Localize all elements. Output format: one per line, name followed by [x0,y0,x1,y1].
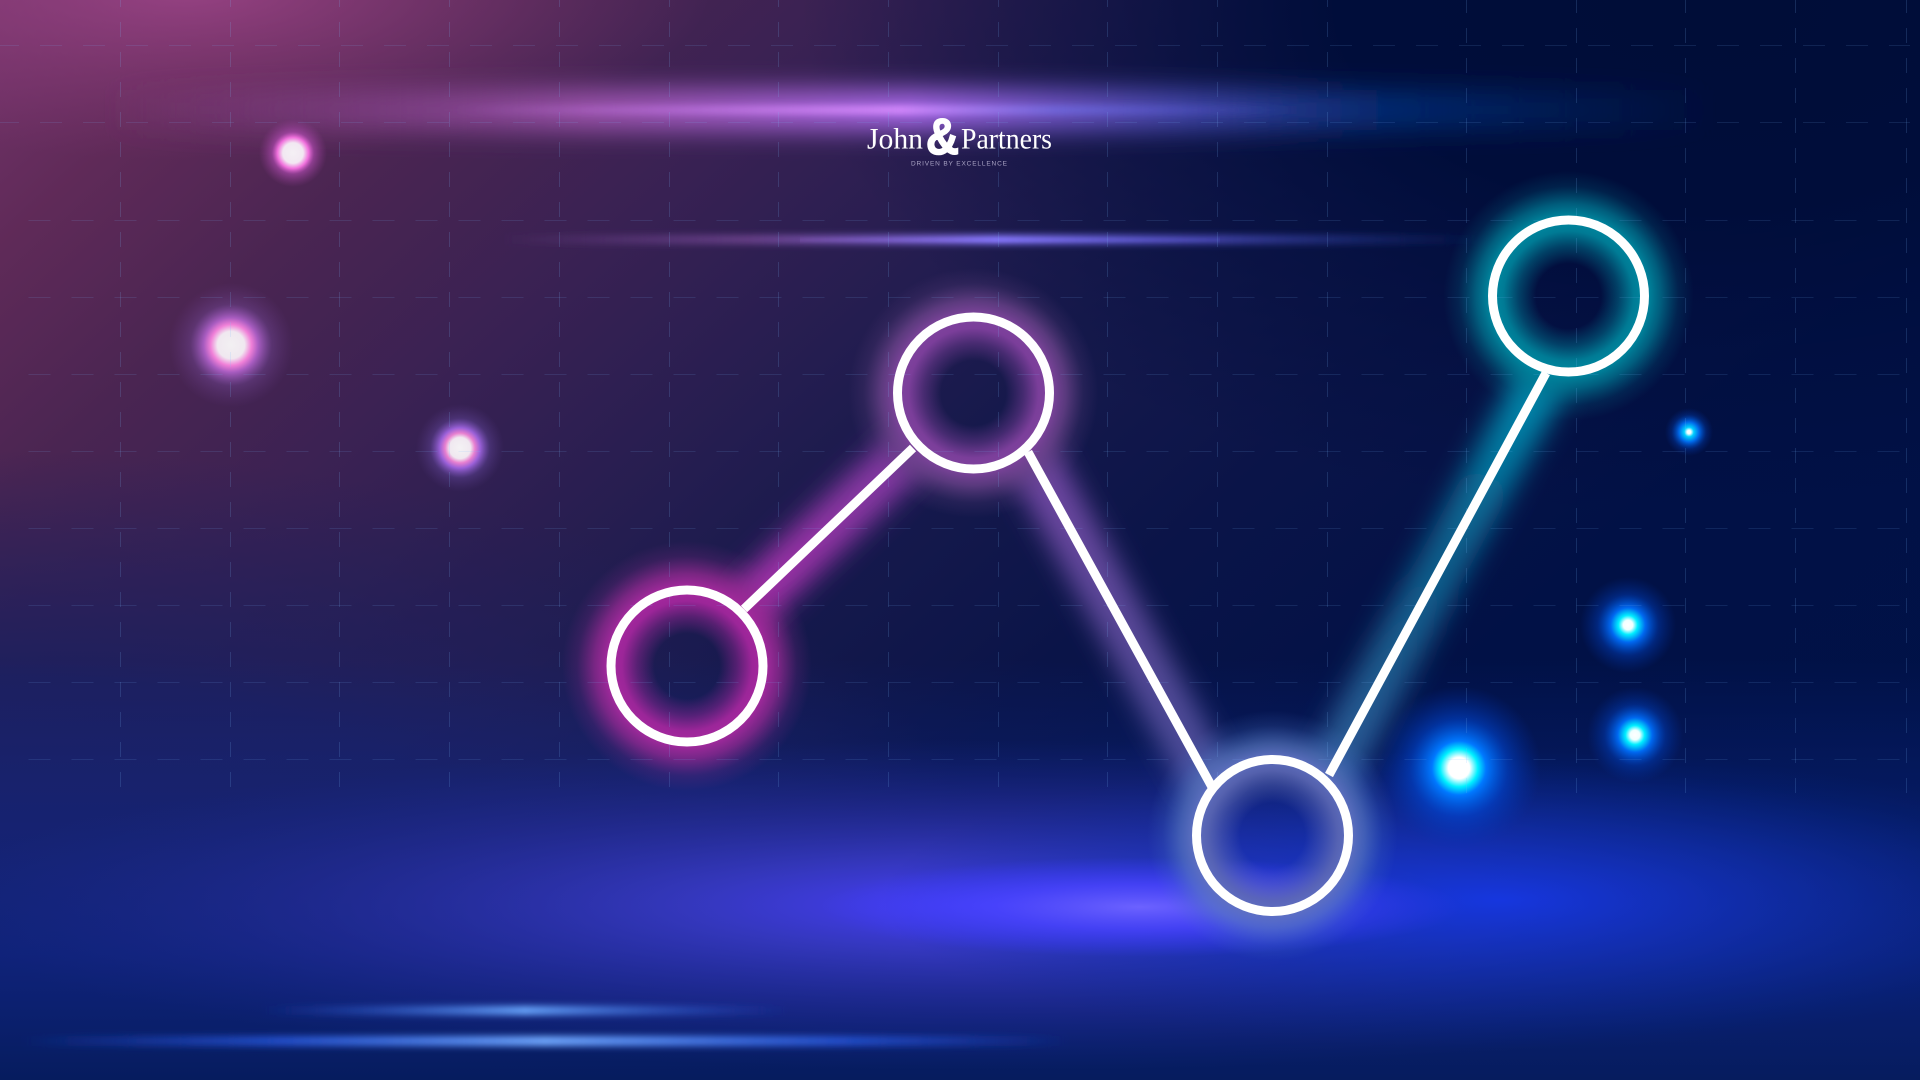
bottom short blue light streak [260,1006,790,1015]
logo: John & Partners: DRIVEN BY EXCELLENCE [911,160,1008,168]
line chart: purple node ring [898,317,1050,469]
logo: John & Partners [867,108,1052,168]
top purple light streak [100,90,1720,130]
logo: John & Partners: & [926,108,959,165]
line chart: magenta node ring [611,590,763,742]
second thin light streak [500,235,1490,244]
cyan and blue glowing dots, right [1377,408,1713,850]
background: glowing blue floor [0,660,1920,1080]
line chart: teal node ring [1492,220,1644,372]
background dashed grid [0,0,1910,800]
logo: John & Partners: Partners [961,122,1052,156]
line chart: white connecting lines [744,373,1546,787]
logo: John & Partners: John [867,122,923,156]
line chart: blue node ring [1196,760,1348,912]
neon glow halos around the circles [562,171,1694,960]
pink and purple glowing dots, upper left [169,119,504,492]
neon glow behind connecting lines [744,373,1546,787]
bottom long blue light streak [20,1036,1070,1046]
